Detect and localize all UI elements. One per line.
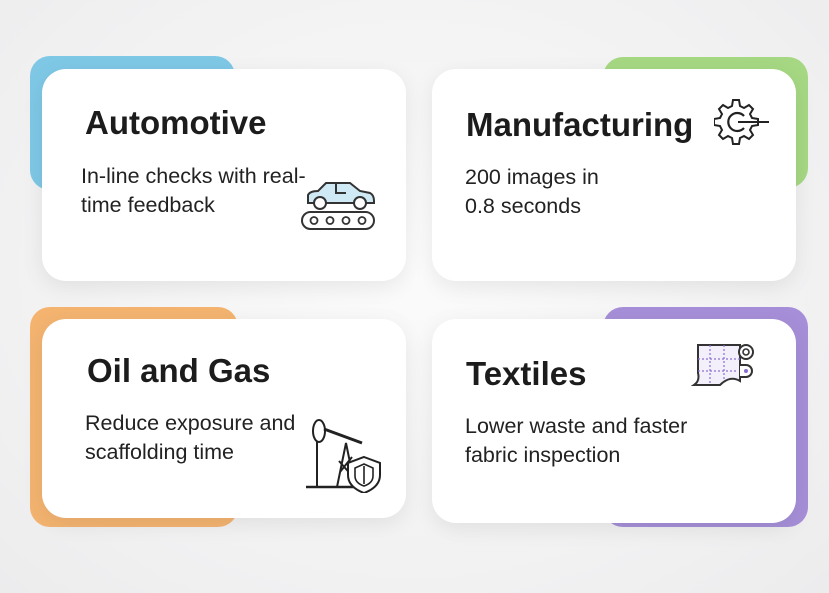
text: manufacturing desc: 200 images in xyxy=(465,165,599,189)
panel: manufacturing xyxy=(432,69,796,281)
accent: manufacturing green xyxy=(603,57,808,188)
text: oil and gas desc: Reduce exposure and xyxy=(85,411,295,435)
panel: automotive xyxy=(42,69,406,281)
panel: textiles xyxy=(432,319,796,523)
icon: car on conveyor xyxy=(301,182,375,230)
heading: manufacturing: Manufacturing xyxy=(466,106,693,143)
text: oil and gas desc: scaffolding time xyxy=(85,440,234,464)
heading: oil and gas: Oil and Gas xyxy=(87,352,270,389)
text: automotive desc: In-line checks with real- xyxy=(81,164,306,188)
text: manufacturing desc: 0.8 seconds xyxy=(465,194,581,218)
accent: oil and gas orange xyxy=(30,307,238,527)
text: textiles desc: fabric inspection xyxy=(465,443,620,467)
text: textiles desc xyxy=(465,414,687,467)
icon: pumpjack with shield xyxy=(306,419,381,493)
icon: gear xyxy=(714,99,769,145)
accent: textiles purple xyxy=(603,307,808,527)
text: textiles desc: Lower waste and faster xyxy=(465,414,687,438)
text: automotive desc: time feedback xyxy=(81,193,215,217)
text: manufacturing desc xyxy=(465,165,599,218)
accent: automotive blue xyxy=(30,56,235,190)
text: oil and gas desc xyxy=(85,411,295,464)
heading: automotive: Automotive xyxy=(85,104,266,141)
panel: oil and gas xyxy=(42,319,406,518)
heading: textiles: Textiles xyxy=(466,355,586,392)
icon: fabric roll xyxy=(690,344,754,386)
text: automotive desc xyxy=(81,164,306,217)
